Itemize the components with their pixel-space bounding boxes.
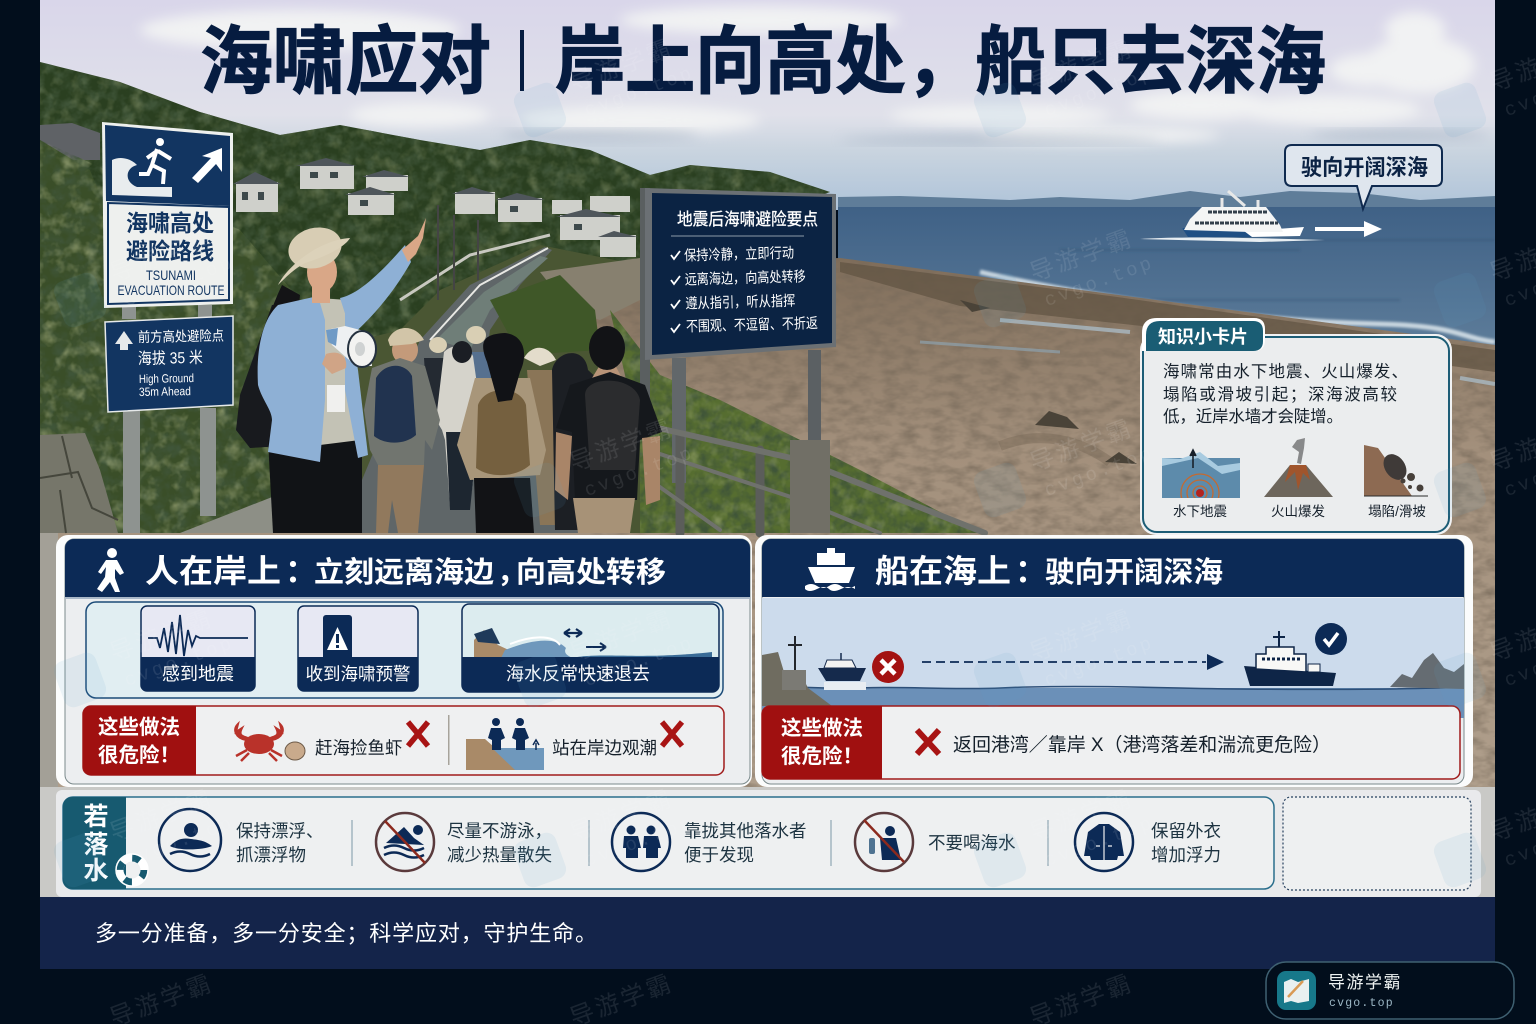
red cross bbox=[917, 730, 939, 754]
danger box: shore: 赶海捡鱼虾 bbox=[315, 738, 402, 758]
panel header: ， bbox=[497, 557, 526, 589]
info sign: evacuation key points: 遵从指引，听从指挥 bbox=[685, 293, 796, 312]
danger box: shore: 这些做法 bbox=[98, 715, 180, 739]
red cross bbox=[662, 722, 682, 746]
warning signs group bbox=[86, 602, 723, 698]
item: stay close bbox=[612, 813, 806, 871]
hillside houses bbox=[40, 123, 638, 257]
watermark pattern: cvgo.top bbox=[1042, 812, 1157, 872]
evacuation route sign: 海啸高处 bbox=[126, 210, 214, 236]
icon labels: 塌陷/滑坡 bbox=[1368, 504, 1426, 519]
item: keep afloat: 抓漂浮物 bbox=[236, 845, 306, 865]
evacuation route sign: 避险路线 bbox=[126, 238, 214, 264]
guide with megaphone bbox=[236, 218, 426, 533]
far walkers bbox=[424, 326, 610, 530]
icon: crab bbox=[235, 724, 305, 761]
shore surf bbox=[978, 268, 1495, 345]
footer band bbox=[40, 897, 1495, 969]
evacuation route sign: TSUNAMI bbox=[146, 267, 196, 283]
tag: if in water: 若 bbox=[83, 803, 109, 831]
watermark pattern: cvgo.top bbox=[1042, 442, 1157, 502]
dashed route arrow bbox=[922, 654, 1224, 670]
white heading arrow bbox=[1315, 221, 1382, 237]
strip behind bottom row bbox=[40, 787, 1495, 897]
watermark pattern: cvgo.top bbox=[1042, 62, 1157, 122]
walker: woman with tan backpack bbox=[457, 333, 546, 533]
panel header and seascape: 驶向开阔深海 bbox=[1045, 556, 1223, 589]
watermark pattern: 导游学霸 bbox=[566, 605, 677, 667]
title: 海啸应对 bbox=[200, 20, 491, 103]
danger box: sea: 返回港湾／靠岸 X（港湾落差和湍流更危险） bbox=[953, 734, 1331, 756]
watermark pattern: 导游学霸 bbox=[1026, 415, 1137, 477]
left foreground vegetation bbox=[40, 140, 290, 533]
panel header and seascape: ： bbox=[1015, 553, 1047, 589]
stone margin left of panels bbox=[40, 533, 58, 790]
evacuation route sign bbox=[102, 122, 233, 533]
ferry at sea bbox=[1140, 191, 1325, 242]
knowledge card bbox=[1140, 318, 1452, 535]
panel header: 立刻远离海边 bbox=[314, 556, 494, 589]
panel: ships at sea bbox=[755, 535, 1473, 787]
watermark pattern: cvgo.top bbox=[582, 62, 697, 122]
callout: head to open deep sea: 驶向开阔深海 bbox=[1301, 155, 1428, 180]
evacuation route sign: EVACUATION ROUTE bbox=[118, 282, 224, 298]
distant mountains bbox=[838, 191, 1495, 208]
watermark pattern: cvgo.top bbox=[582, 442, 697, 502]
card tab bbox=[1142, 318, 1265, 351]
high ground distance sign: 35m Ahead bbox=[139, 384, 191, 399]
panel header: 人在岸上 bbox=[145, 553, 281, 589]
title bbox=[200, 20, 1326, 103]
card: tsunami warning bbox=[298, 606, 418, 691]
card: sea recedes bbox=[462, 604, 719, 692]
high ground distance sign bbox=[105, 316, 233, 412]
icon: life ring bbox=[116, 854, 148, 886]
check badge bbox=[1315, 623, 1347, 655]
item: keep coat: 保留外衣 bbox=[1151, 821, 1221, 841]
item: keep coat bbox=[1075, 813, 1221, 871]
road and pavement bbox=[180, 205, 610, 533]
watermark pattern: cvgo.top bbox=[582, 632, 697, 692]
item: no drinking seawater: 不要喝海水 bbox=[928, 833, 1016, 853]
info sign: evacuation key points: 远离海边，向高处转移 bbox=[684, 268, 806, 288]
icon labels: 水下地震 bbox=[1173, 504, 1227, 519]
card text bbox=[1163, 362, 1408, 426]
watermark pattern: 导游学霸 bbox=[106, 605, 217, 667]
danger box: shore bbox=[83, 706, 724, 775]
watermark pattern: 导游学霸 bbox=[1026, 605, 1137, 667]
watermark pattern: cvgo.top bbox=[122, 252, 237, 312]
metal railing bbox=[650, 428, 985, 533]
tag: if in water bbox=[63, 797, 148, 889]
hillside forest bbox=[40, 62, 830, 336]
card: felt earthquake: 感到地震 bbox=[162, 664, 234, 684]
tag: if in water: 水 bbox=[83, 857, 109, 885]
panel header: 向高处转移 bbox=[516, 556, 666, 589]
title: 岸上向高处，船只去深海 bbox=[555, 20, 1326, 103]
group of walkers seen from behind bbox=[236, 218, 662, 533]
danger box: shore: 站在岸边观潮 bbox=[552, 738, 657, 758]
card: felt earthquake bbox=[141, 606, 255, 691]
icon labels: 火山爆发 bbox=[1271, 504, 1325, 519]
walker: man with navy backpack bbox=[364, 328, 440, 533]
info sign: evacuation key points: 地震后海啸避险要点 bbox=[677, 210, 818, 229]
sea cliff below road bbox=[540, 258, 640, 320]
item: keep coat: 增加浮力 bbox=[1151, 845, 1221, 865]
icon: ship bbox=[805, 548, 855, 591]
danger box: sea bbox=[762, 706, 1460, 779]
watermark pattern: cvgo.top bbox=[122, 812, 237, 872]
icon: landslide bbox=[1364, 445, 1428, 496]
tag: if in water: 落 bbox=[83, 831, 109, 859]
callout: head to open deep sea bbox=[1285, 145, 1442, 209]
item: avoid swimming bbox=[376, 813, 552, 871]
watermark pattern: 导游学霸 bbox=[1026, 785, 1137, 847]
high ground distance sign: 海拔 35 米 bbox=[138, 349, 203, 368]
card: tsunami warning: 收到海啸预警 bbox=[306, 664, 410, 684]
right roadside bushes bbox=[490, 275, 990, 540]
brand badge: cvgo.top bbox=[1329, 997, 1394, 1010]
watermark pattern: cvgo.top bbox=[582, 812, 697, 872]
card tab: 知识小卡片 bbox=[1158, 327, 1248, 347]
sign pictogram bbox=[112, 138, 222, 197]
item: stay close: 靠拢其他落水者 bbox=[684, 821, 806, 841]
watermark pattern: 导游学霸 bbox=[106, 225, 217, 287]
icon: volcano bbox=[1264, 438, 1333, 497]
icon labels bbox=[1173, 504, 1426, 519]
watermark pattern: cvgo.top bbox=[1042, 252, 1157, 312]
item: stay close: 便于发现 bbox=[684, 845, 754, 865]
item: no drinking seawater bbox=[855, 813, 1016, 871]
base land behind road bbox=[358, 245, 640, 533]
item: keep afloat: 保持漂浮、 bbox=[236, 821, 324, 841]
watermark pattern: 导游学霸 bbox=[1026, 225, 1137, 287]
panel header: ： bbox=[285, 553, 317, 589]
card text: 塌陷或滑坡引起；深海波高较 bbox=[1163, 385, 1397, 404]
panel: people on shore bbox=[56, 535, 752, 787]
item: avoid swimming: 减少热量散失 bbox=[447, 845, 552, 865]
panel header and seascape bbox=[762, 539, 1464, 718]
red cross bbox=[408, 722, 428, 746]
panel header and seascape: 船在海上 bbox=[875, 553, 1011, 589]
danger box: sea: 这些做法 bbox=[781, 716, 863, 740]
walker: man in black tee bbox=[555, 326, 662, 533]
stone wall bbox=[40, 433, 118, 533]
watermark pattern: 导游学霸 bbox=[566, 35, 677, 97]
item: avoid swimming: 尽量不游泳， bbox=[447, 821, 552, 841]
brand badge bbox=[1266, 962, 1514, 1019]
card text: 低，近岸水墙才会陡增。 bbox=[1163, 407, 1343, 426]
brand badge: 导游学霸 bbox=[1328, 973, 1402, 992]
panel header bbox=[65, 539, 750, 599]
info sign: evacuation key points: 不围观、不逗留、不折返 bbox=[686, 315, 818, 335]
watermark pattern: 导游学霸 bbox=[1026, 35, 1137, 97]
sea bbox=[838, 207, 1495, 357]
watermark pattern: cvgo.top bbox=[1042, 632, 1157, 692]
icon: walking person bbox=[97, 548, 124, 592]
icon: undersea earthquake bbox=[1162, 448, 1240, 498]
danger box: shore: 很危险！ bbox=[98, 743, 180, 767]
empty dashed box bbox=[1283, 797, 1471, 890]
rocky islet bbox=[1390, 653, 1464, 689]
icon: map logo bbox=[1277, 971, 1316, 1010]
watermark pattern: 导游学霸 bbox=[566, 785, 677, 847]
small boat in harbour bbox=[818, 653, 866, 690]
high ground distance sign: High Ground bbox=[139, 371, 194, 386]
footer band: 多一分准备，多一分安全；科学应对，守护生命。 bbox=[95, 921, 597, 946]
card: sea recedes: 海水反常快速退去 bbox=[506, 664, 650, 684]
watermark pattern: 导游学霸 bbox=[106, 785, 217, 847]
harbour with lighthouse bbox=[762, 636, 832, 706]
large ship bbox=[1244, 631, 1336, 686]
danger box: sea: 很危险！ bbox=[781, 744, 863, 768]
sky with clouds bbox=[40, 0, 1495, 210]
info sign: evacuation key points bbox=[640, 188, 836, 483]
beach bbox=[58, 258, 1495, 787]
icon: people on shore bbox=[466, 718, 544, 770]
if in water: advice row bbox=[63, 797, 1274, 889]
info sign: evacuation key points: 保持冷静，立即行动 bbox=[684, 245, 794, 264]
watermark pattern: 导游学霸 bbox=[566, 415, 677, 477]
item: keep afloat bbox=[159, 809, 324, 871]
card text: 海啸常由水下地震、火山爆发、 bbox=[1163, 362, 1408, 381]
red cross badge bbox=[872, 651, 904, 683]
high ground distance sign: 前方高处避险点 bbox=[138, 328, 224, 345]
watermark pattern: cvgo.top bbox=[122, 632, 237, 692]
